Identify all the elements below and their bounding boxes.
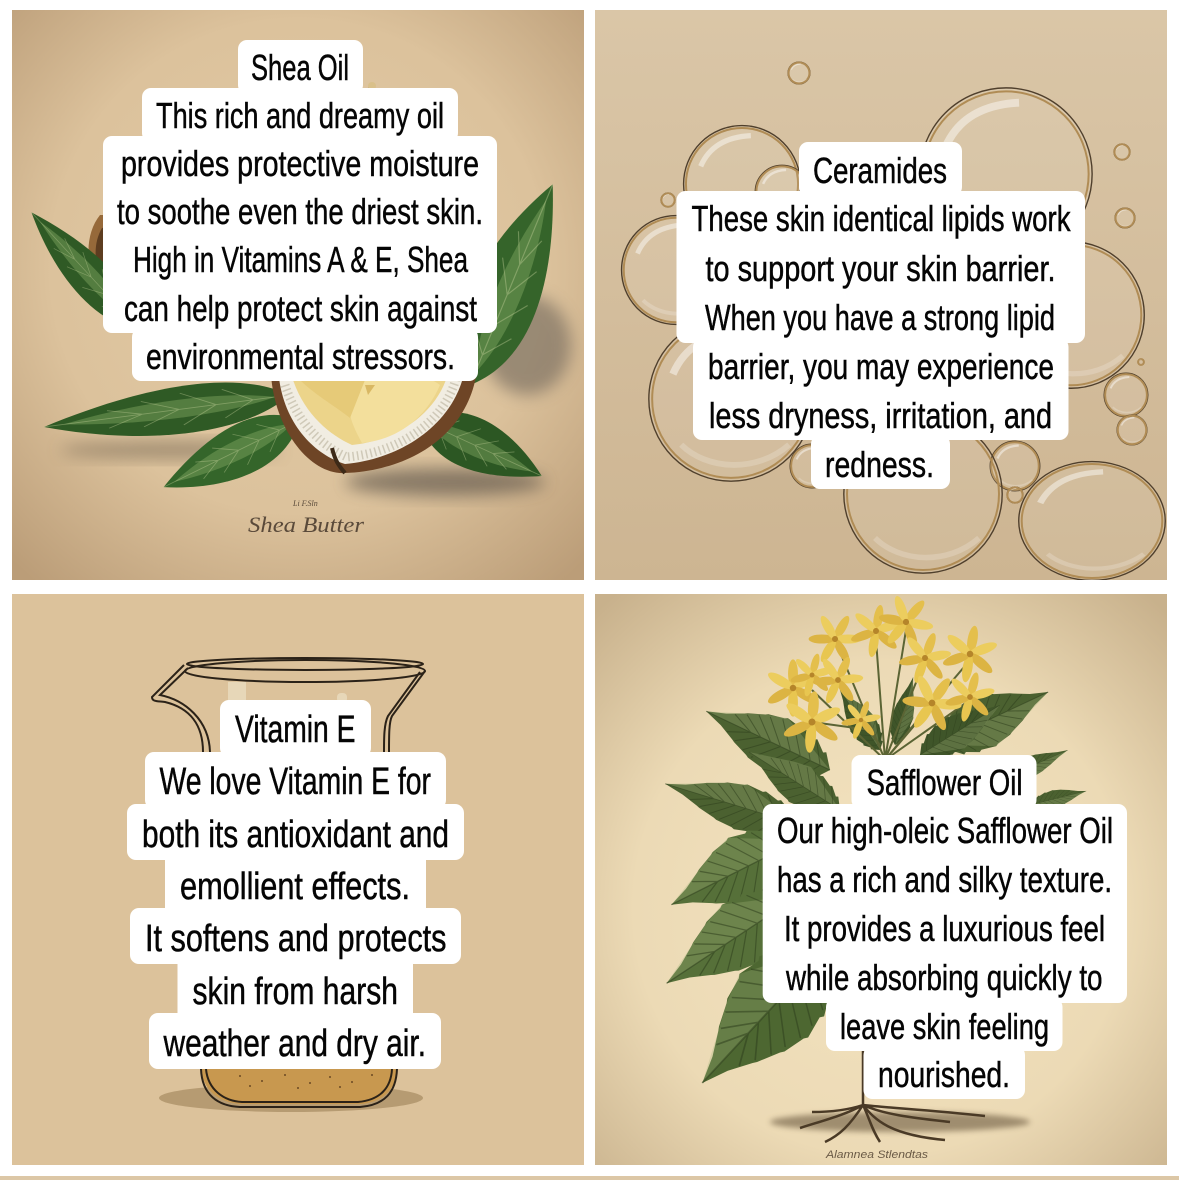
- body text: shea oil: High in Vitamins A & E, Shea: [133, 239, 469, 280]
- illustration: safflower plant: [647, 584, 1088, 1142]
- heading: ceramides: Ceramides: [813, 150, 947, 191]
- label: shea butter script: [248, 499, 364, 537]
- text block: vitamin e: [127, 700, 464, 1069]
- body text: safflower oil: nourished.: [878, 1054, 1010, 1095]
- body text: shea oil: This rich and dreamy oil: [156, 95, 444, 136]
- body text: safflower oil: [777, 810, 1113, 1095]
- body text: vitamin e: It softens and protects: [145, 918, 446, 960]
- body text: vitamin e: emollient effects.: [180, 866, 410, 908]
- body text: vitamin e: both its antioxidant and: [142, 814, 449, 856]
- body text: ceramides: When you have a strong lipid: [705, 297, 1055, 338]
- white label backing: [127, 700, 464, 1069]
- illustration: shea nut and leaves: [16, 82, 583, 511]
- label: shea butter script: Li F.Sln: [292, 499, 318, 508]
- safflower background: [595, 594, 1167, 1165]
- panel: shea oil: [12, 10, 584, 580]
- shea background: [12, 10, 584, 580]
- vitamin e background: [12, 594, 584, 1165]
- text block: shea oil: [103, 40, 497, 381]
- body text: ceramides: less dryness, irritation, and: [709, 395, 1052, 436]
- text block: ceramides: [676, 142, 1085, 489]
- panel: ceramides: [595, 10, 1167, 581]
- heading: safflower oil: Safflower Oil: [866, 762, 1022, 803]
- illustration: glass beaker: [152, 658, 425, 1112]
- white label backing: [763, 755, 1127, 1099]
- ceramides background: [595, 10, 1167, 580]
- text block: safflower oil: [763, 755, 1127, 1099]
- bottom beige strip: [0, 1176, 1179, 1180]
- body text: safflower oil: leave skin feeling: [840, 1006, 1049, 1047]
- body text: shea oil: [117, 95, 483, 377]
- body text: ceramides: These skin identical lipids work: [692, 198, 1071, 239]
- body text: ceramides: redness.: [825, 444, 934, 485]
- body text: vitamin e: weather and dry air.: [163, 1023, 426, 1065]
- body text: vitamin e: skin from harsh: [192, 971, 398, 1013]
- body text: vitamin e: [142, 761, 449, 1065]
- body text: ceramides: barrier, you may experience: [708, 346, 1054, 387]
- body text: ceramides: [692, 198, 1071, 485]
- white label backing: [676, 142, 1085, 489]
- white label backing: [103, 40, 497, 381]
- body text: shea oil: provides protective moisture: [121, 143, 479, 184]
- panel: safflower oil: [595, 584, 1167, 1165]
- body text: shea oil: environmental stressors.: [146, 336, 455, 377]
- heading: shea oil: Shea Oil: [251, 47, 349, 88]
- body text: ceramides: to support your skin barrier.: [706, 248, 1056, 289]
- heading: vitamin e: Vitamin E: [235, 709, 356, 751]
- illustration: lipid bubbles: [621, 62, 1166, 581]
- body text: shea oil: to soothe even the driest skin.: [117, 191, 483, 232]
- label: shea butter script: Shea Butter: [248, 512, 364, 537]
- panel: vitamin e: [12, 594, 584, 1165]
- label: botanical script: Alamnea Stlendtas: [825, 1149, 929, 1161]
- body text: vitamin e: We love Vitamin E for: [160, 761, 431, 803]
- body text: shea oil: can help protect skin against: [124, 288, 477, 329]
